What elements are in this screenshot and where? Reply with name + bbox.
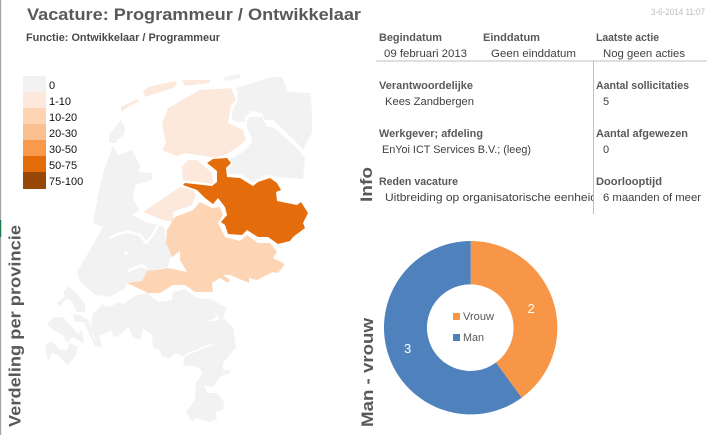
province: Noord-Holland, Zuid-Holland, Utrecht: [77, 146, 178, 297]
province: Gelderland: [127, 202, 285, 293]
info panel: [376, 32, 707, 214]
map legend: 50-75: [49, 160, 77, 172]
province: Groningen: [232, 77, 312, 150]
province: Limburg: [183, 298, 236, 422]
donut chart: man / vrouw: Vrouw: [463, 311, 494, 323]
province: Noord-Brabant: [91, 289, 217, 358]
rotated heading: info: Info: [357, 167, 376, 202]
info panel: Laatste actie: [596, 32, 659, 44]
province: Drenthe: [227, 117, 305, 182]
info panel: Doorlooptijd: [596, 176, 662, 188]
info panel: Kees Zandbergen: [385, 96, 474, 108]
map legend: 20-30: [49, 128, 77, 140]
info panel: Uitbreiding op organisatorische eenheid: [385, 192, 597, 204]
map legend: 75-100: [49, 176, 83, 188]
map legend: 10-20: [49, 112, 77, 124]
info panel: Reden vacature: [379, 176, 458, 188]
rotated heading: gender chart: Man - vrouw: [358, 317, 377, 427]
info panel: Verantwoordelijke: [379, 80, 473, 92]
info panel: 09 februari 2013: [384, 48, 467, 60]
title: Vacature: Programmeur / Ontwikkelaar: [27, 5, 361, 24]
info panel: Werkgever; afdeling: [379, 128, 483, 140]
map legend: 0: [49, 80, 55, 92]
map legend: 1-10: [49, 96, 71, 108]
donut chart: man / vrouw: [384, 241, 557, 414]
info panel: Geen einddatum: [491, 48, 576, 60]
info panel: Nog geen acties: [603, 48, 686, 60]
province: Friesland: [162, 88, 246, 158]
islands: [109, 74, 240, 143]
timestamp: 3-6-2014 11:07: [651, 7, 705, 17]
info panel: 6 maanden of meer: [603, 192, 701, 204]
segment: Man: [384, 241, 522, 414]
donut chart: man / vrouw: Man: [463, 332, 484, 344]
map legend: 30-50: [49, 144, 77, 156]
segment: Vrouw: [471, 241, 557, 398]
info panel: Aantal sollicitaties: [596, 80, 689, 92]
donut chart: man / vrouw: 3: [404, 341, 411, 356]
info panel: Einddatum: [483, 32, 540, 44]
province: Overijssel: [183, 158, 308, 244]
province: Flevoland: [143, 160, 213, 222]
info panel: Aantal afgewezen: [596, 128, 688, 140]
donut chart: man / vrouw: 2: [528, 301, 535, 316]
rotated heading: map: Verdeling per provincie: [6, 225, 24, 427]
info panel: EnYoi ICT Services B.V.; (leeg): [382, 144, 531, 156]
province: Zeeland: [45, 286, 99, 365]
info panel: 0: [603, 144, 609, 156]
subtitle: Functie: Ontwikkelaar / Programmeur: [26, 32, 221, 44]
map legend: [23, 76, 83, 189]
info panel: Begindatum: [379, 32, 442, 44]
info panel: 5: [603, 96, 609, 108]
map: provinces of the Netherlands: [45, 74, 312, 422]
